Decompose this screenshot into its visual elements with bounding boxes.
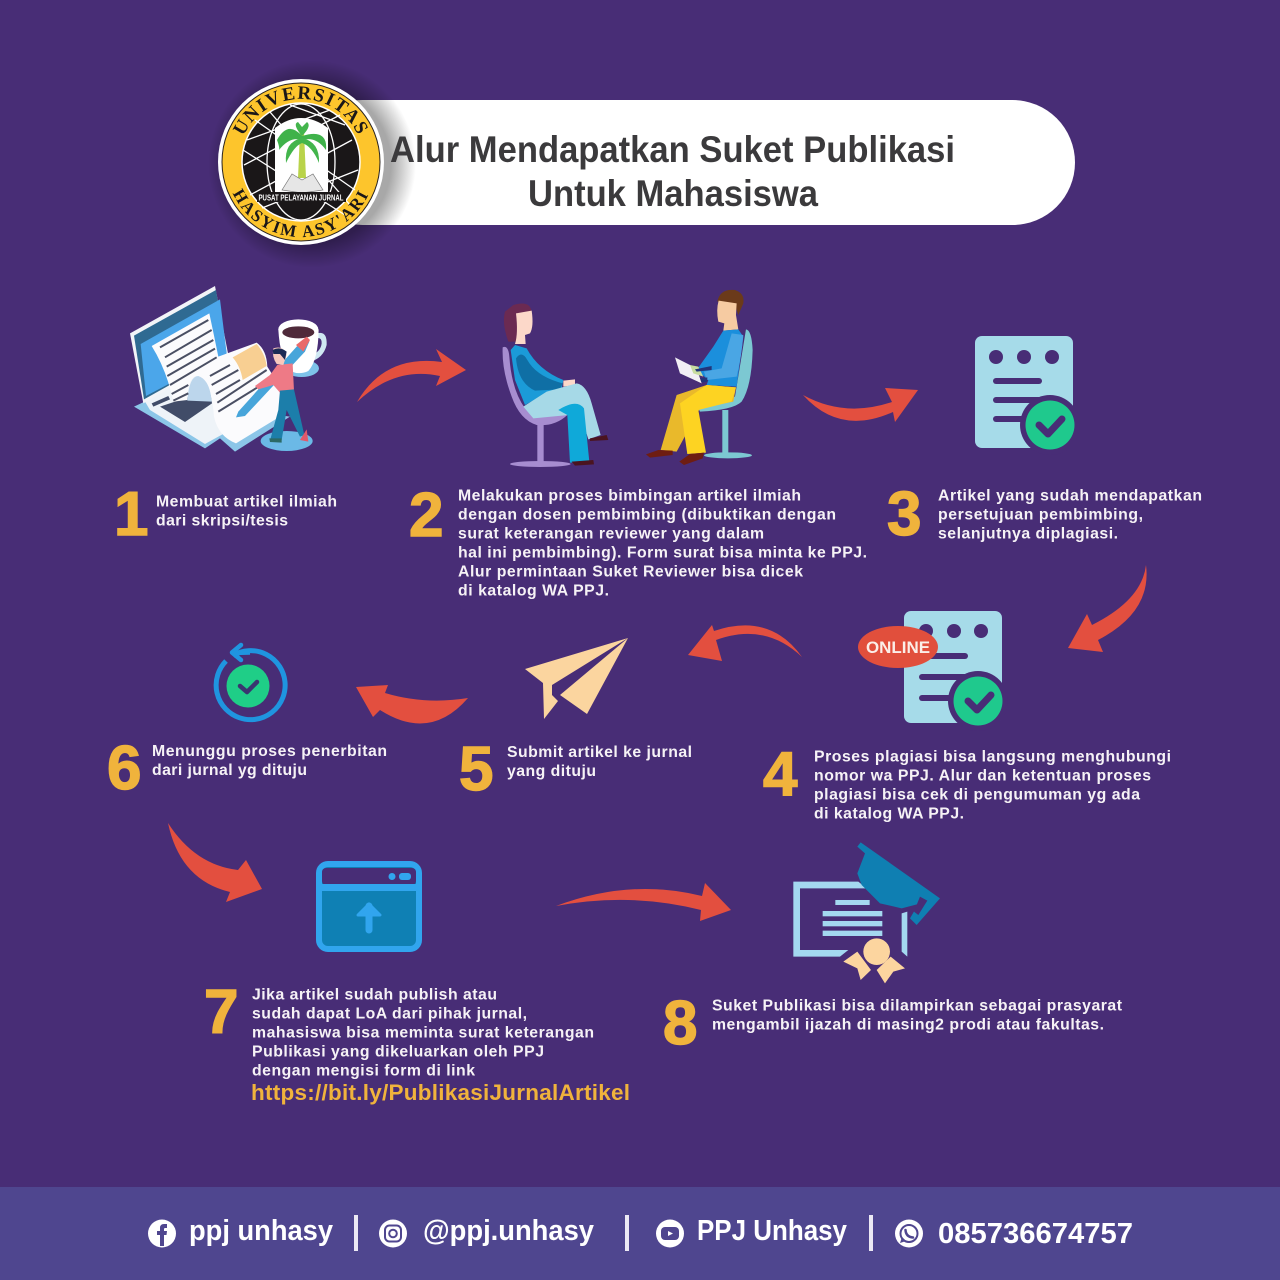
number 6: 6 xyxy=(107,734,141,803)
text: step 4 xyxy=(814,748,1171,822)
arrow 2 to 3 xyxy=(803,388,918,422)
logo: Universitas Hasyim Asy'ari: PUSAT PELAYANAN JURNAL xyxy=(258,192,344,202)
step 2 xyxy=(409,290,867,600)
step 1 xyxy=(114,286,337,549)
contact: phone: 085736674757 xyxy=(938,1218,1133,1250)
number 3: 3 xyxy=(887,480,921,549)
icon: paper plane xyxy=(525,638,628,719)
text: step 4: plagiasi bisa cek di pengumuman yg ada xyxy=(814,786,1140,804)
icon: two people in chairs xyxy=(503,290,753,467)
step 6 xyxy=(107,645,387,803)
title text xyxy=(390,129,955,214)
text: step 6: dari jurnal yg dituju xyxy=(152,762,307,779)
logo: Universitas Hasyim Asy'ari: HASYIM ASY'ARI xyxy=(232,188,368,238)
number 2: 2 xyxy=(409,481,443,550)
icon: online document with check xyxy=(858,611,1008,731)
arrow 1 to 2 xyxy=(357,349,466,402)
logo: Universitas Hasyim Asy'ari xyxy=(218,79,384,245)
icon: youtube xyxy=(656,1220,684,1248)
footer band xyxy=(0,1187,1280,1280)
step 7 xyxy=(204,864,630,1105)
text: step 7: sudah dapat LoA dari pihak jurnal, xyxy=(252,1006,527,1022)
text: step 7: Publikasi yang dikeluarkan oleh PPJ xyxy=(252,1044,544,1060)
text: step 2: hal ini pembimbing). Form surat bisa minta ke PPJ. xyxy=(458,544,867,562)
text: step 7: Jika artikel sudah publish atau xyxy=(252,986,497,1004)
text: step 1 xyxy=(156,494,337,530)
text: step 4: di katalog WA PPJ. xyxy=(814,806,964,822)
text: step 5: yang dituju xyxy=(507,763,596,780)
text: step 6 xyxy=(152,743,387,779)
text: step 3 xyxy=(938,488,1202,542)
number 7: 7 xyxy=(204,978,238,1047)
icon: document with check xyxy=(975,336,1080,455)
number 8: 8 xyxy=(663,989,697,1058)
step 5 xyxy=(459,638,692,804)
text: step 2: surat keterangan reviewer yang dalam xyxy=(458,526,764,542)
step 8 xyxy=(663,842,1123,1058)
icon: facebook xyxy=(148,1220,176,1248)
arrow 3 to 4 xyxy=(1068,565,1147,652)
arrow 4 to 5 xyxy=(688,625,802,661)
text: step 2: dengan dosen pembimbing (dibuktikan dengan xyxy=(458,506,836,524)
mug xyxy=(284,360,319,377)
number 4: 4 xyxy=(763,740,798,809)
badge: online xyxy=(858,626,938,668)
text: step 8: Suket Publikasi bisa dilampirkan sebagai prasyarat xyxy=(712,998,1123,1014)
man xyxy=(646,290,753,465)
icon: laptop, paper, person and coffee xyxy=(130,286,327,452)
number 5: 5 xyxy=(459,735,493,804)
logo palm panel xyxy=(275,118,328,193)
contact: instagram: @ppj.unhasy xyxy=(423,1215,594,1247)
contact: facebook: ppj unhasy xyxy=(189,1215,333,1247)
icon: whatsapp xyxy=(895,1220,923,1248)
text: step 7: dengan mengisi form di link xyxy=(252,1062,475,1080)
contact: youtube: PPJ Unhasy xyxy=(697,1215,847,1247)
arrow 7 to 8 xyxy=(556,883,731,921)
text: step 4: Proses plagiasi bisa langsung menghubungi xyxy=(814,748,1171,766)
arrow 6 to 7 xyxy=(168,823,262,902)
text: step 1: dari skripsi/tesis xyxy=(156,512,288,530)
text: step 2: Alur permintaan Suket Reviewer bisa dicek xyxy=(458,564,803,580)
logo shadow xyxy=(208,60,416,268)
title text: Alur Mendapatkan Suket Publikasi xyxy=(390,129,955,170)
text: step 3: selanjutnya diplagiasi. xyxy=(938,526,1118,542)
title pill xyxy=(300,100,1075,225)
text: step 8: mengambil ijazah di masing2 prodi atau fakultas. xyxy=(712,1016,1104,1034)
icon: browser window upload xyxy=(319,864,419,949)
woman xyxy=(503,303,608,467)
text: step 5 xyxy=(507,744,692,780)
text: step 3: persetujuan pembimbing, xyxy=(938,506,1143,524)
icon: certificate, cap and ribbon xyxy=(793,842,940,983)
logo: Universitas Hasyim Asy'ari: UNIVERSITAS xyxy=(232,86,368,134)
step 3 xyxy=(887,336,1202,549)
text: step 2: Melakukan proses bimbingan artikel ilmiah xyxy=(458,488,801,504)
text: step 5: Submit artikel ke jurnal xyxy=(507,744,692,761)
text: step 8 xyxy=(712,998,1123,1034)
text: step 3: Artikel yang sudah mendapatkan xyxy=(938,488,1202,504)
text: step 1: Membuat artikel ilmiah xyxy=(156,494,337,510)
text: step 7 xyxy=(252,986,594,1080)
text: step 2 xyxy=(458,488,867,600)
link: https://bit.ly/PublikasiJurnalArtikel xyxy=(251,1080,630,1105)
title text: Untuk Mahasiswa xyxy=(528,173,818,214)
header: logo and title pill xyxy=(214,66,1075,262)
text: step 7: mahasiswa bisa meminta surat keterangan xyxy=(252,1024,594,1042)
number 1: 1 xyxy=(114,480,148,549)
badge: online: ONLINE xyxy=(866,638,930,657)
icon: refresh with check xyxy=(216,645,285,720)
text: step 6: Menunggu proses penerbitan xyxy=(152,743,387,760)
arrow 5 to 6 xyxy=(356,685,468,723)
step 4 xyxy=(763,611,1171,822)
person xyxy=(261,431,313,451)
text: step 4: nomor wa PPJ. Alur dan ketentuan proses xyxy=(814,768,1151,784)
icon: instagram xyxy=(379,1220,407,1248)
text: step 2: di katalog WA PPJ. xyxy=(458,582,609,600)
